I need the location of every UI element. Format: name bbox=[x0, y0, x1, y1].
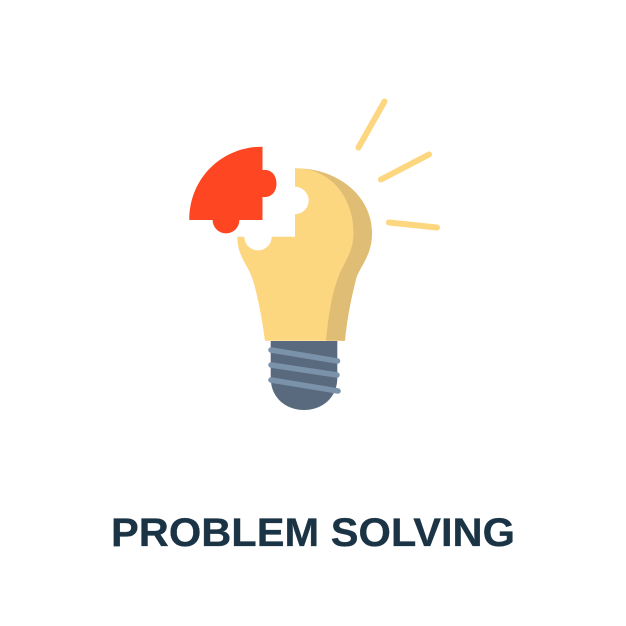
icon: bulb glass bbox=[237, 168, 372, 341]
icon: red puzzle piece bbox=[189, 147, 276, 233]
icon: bulb shaded side bbox=[295, 168, 372, 341]
icon: light bulb with puzzle piece bbox=[189, 102, 437, 410]
icon: light rays bbox=[358, 102, 437, 228]
icon: bulb screw base bbox=[271, 341, 337, 410]
title: PROBLEM SOLVING bbox=[111, 511, 515, 555]
icon: screw threads bbox=[271, 350, 338, 391]
